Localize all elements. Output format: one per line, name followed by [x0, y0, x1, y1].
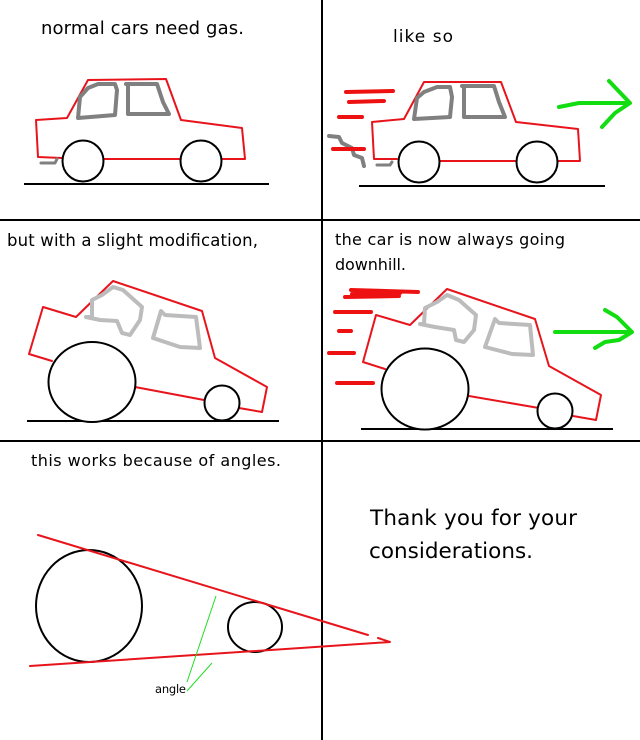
green pointer lines — [187, 596, 216, 691]
small wheel — [228, 602, 282, 652]
label: angle: angle — [155, 682, 186, 696]
caption: works because of angles: this works because of angles. — [31, 451, 281, 470]
thank you message — [369, 506, 577, 564]
exhaust puff — [41, 159, 57, 163]
ground line — [359, 185, 605, 187]
panel: modified car — [7, 231, 279, 422]
caption: slight modification: but with a slight modification, — [7, 231, 258, 250]
caption: always going downhill: the car is now always going — [335, 230, 565, 249]
large wheel — [36, 550, 142, 662]
wheels — [382, 348, 572, 430]
red angle lines — [30, 535, 390, 666]
panel: angles diagram — [30, 451, 390, 696]
exhaust puff — [377, 162, 392, 165]
car windows — [420, 295, 533, 355]
wheels — [398, 142, 558, 182]
car windows — [414, 86, 505, 119]
car windows — [78, 84, 169, 118]
green arrow — [559, 81, 630, 127]
wheels — [62, 140, 222, 182]
ground line — [24, 183, 269, 185]
car body — [363, 289, 601, 420]
ground line — [361, 428, 613, 430]
panel: like so — [329, 27, 630, 186]
car body — [372, 82, 580, 161]
exhaust smoke — [329, 136, 364, 166]
panel: thank you — [369, 506, 577, 564]
car body — [29, 281, 267, 412]
green arrow — [555, 310, 632, 348]
thank you message: Thank you for your — [369, 506, 577, 531]
speed lines — [333, 91, 393, 149]
car windows — [86, 287, 200, 348]
wheels — [48, 342, 240, 422]
caption: always going downhill: downhill. — [335, 255, 406, 274]
caption: like so: like so — [393, 27, 453, 47]
thank you message: considerations. — [369, 539, 533, 564]
car body — [36, 79, 245, 159]
panel: normal car — [24, 18, 269, 184]
caption: always going downhill — [335, 230, 565, 274]
speed lines — [329, 290, 418, 383]
ground line — [27, 420, 279, 422]
panel: always downhill — [329, 230, 632, 430]
caption: normal cars need gas: normal cars need gas. — [41, 18, 244, 39]
